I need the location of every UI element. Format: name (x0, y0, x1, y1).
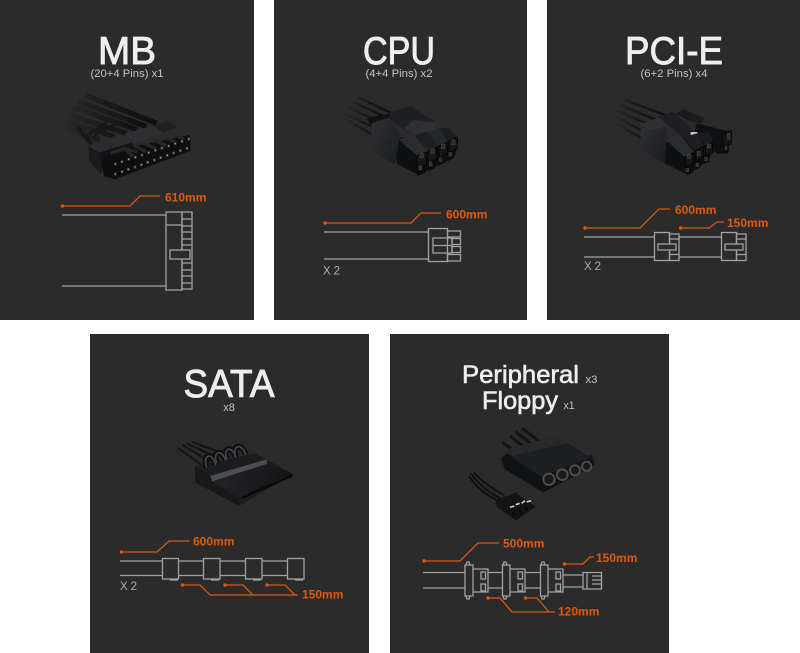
title: CPU: CPU (363, 30, 435, 73)
icon: PCI-E connector (611, 100, 731, 175)
leader: 500mm (422, 536, 544, 563)
icon: Molex connector (501, 428, 595, 493)
title: Peripheral: Peripheral (462, 361, 579, 389)
leader: 600mm: 600mm (193, 534, 234, 548)
leader: 150mm (679, 216, 768, 230)
subtitle: SATA count: x8 (223, 402, 235, 414)
subtitle: CPU pins: (4+4 Pins) x2 (366, 68, 432, 80)
panel: MB (0, 0, 254, 320)
title: MB: MB (98, 30, 156, 73)
leader: 600mm (323, 208, 487, 225)
diagram: PCI-E cable (584, 232, 746, 260)
label: X 2: X 2 (323, 266, 340, 278)
diagram: SATA cable (120, 558, 304, 580)
title: SATA: SATA (184, 363, 274, 406)
diagram: MB cable (62, 212, 192, 290)
leader: 600mm (583, 203, 716, 230)
count: x3: x3 (586, 374, 598, 386)
panel: PCI-E (547, 0, 800, 320)
leader: 600mm: 600mm (446, 208, 487, 222)
leader: 150mm: 150mm (596, 551, 637, 565)
icon: CPU connector (341, 97, 458, 176)
leader: 500mm: 500mm (503, 536, 544, 550)
title: PCI-E: PCI-E (625, 30, 723, 73)
leader: 610mm (61, 190, 206, 208)
label: X 2: X 2 (584, 261, 601, 273)
leader: 120mm (486, 596, 599, 618)
panel: CPU (274, 0, 527, 320)
leader: 150mm (181, 583, 343, 602)
icon: SATA connector (178, 442, 293, 506)
diagram: Peripheral cable (423, 562, 602, 599)
leader: 150mm: 150mm (727, 216, 768, 230)
leader: 600mm (120, 534, 234, 554)
label: X 2: X 2 (120, 581, 137, 593)
icon: Floppy connector (469, 473, 536, 521)
leader: 600mm: 600mm (675, 203, 716, 217)
icon: MB connector (62, 95, 191, 179)
count: x1: x1 (564, 400, 574, 412)
panel: Peripheral and Floppy (390, 334, 669, 653)
subtitle: PCI-E pins: (6+2 Pins) x4 (640, 68, 708, 80)
subtitle: MB pins: (20+4 Pins) x1 (90, 68, 164, 80)
leader: 150mm: 150mm (302, 588, 343, 602)
diagram: CPU cable (324, 228, 460, 262)
leader: 120mm: 120mm (558, 604, 599, 618)
leader: 610mm: 610mm (165, 190, 206, 204)
leader: 150mm (563, 551, 637, 566)
panel: SATA (90, 334, 369, 653)
title: Floppy: Floppy (482, 387, 558, 415)
